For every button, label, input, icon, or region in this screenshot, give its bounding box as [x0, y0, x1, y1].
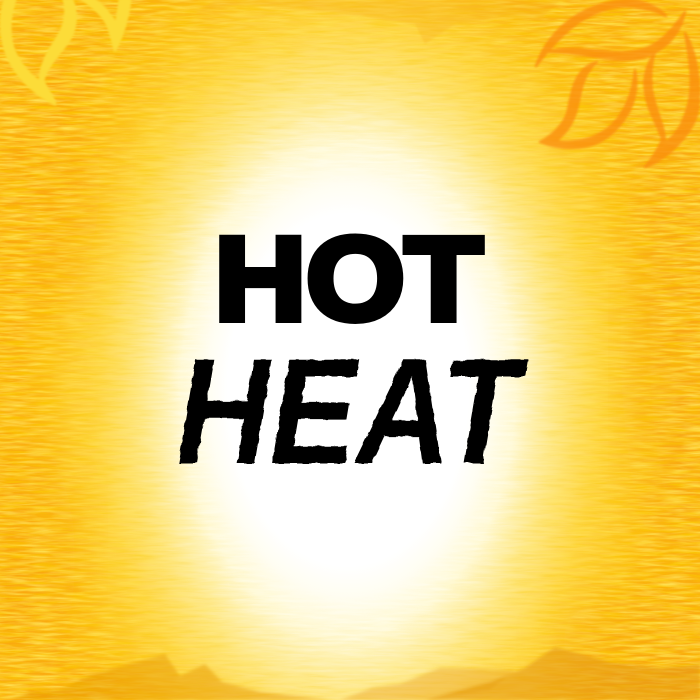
heading: HEAT: HEAT — [176, 327, 530, 495]
torn mountain shapes at bottom — [10, 647, 700, 700]
icon: orange leaf outline top right — [536, 0, 699, 167]
torn paper edge at top — [195, 0, 560, 44]
icon: yellow leaf outline top left — [1, 0, 130, 104]
heading: HOT: HOT — [214, 214, 482, 346]
